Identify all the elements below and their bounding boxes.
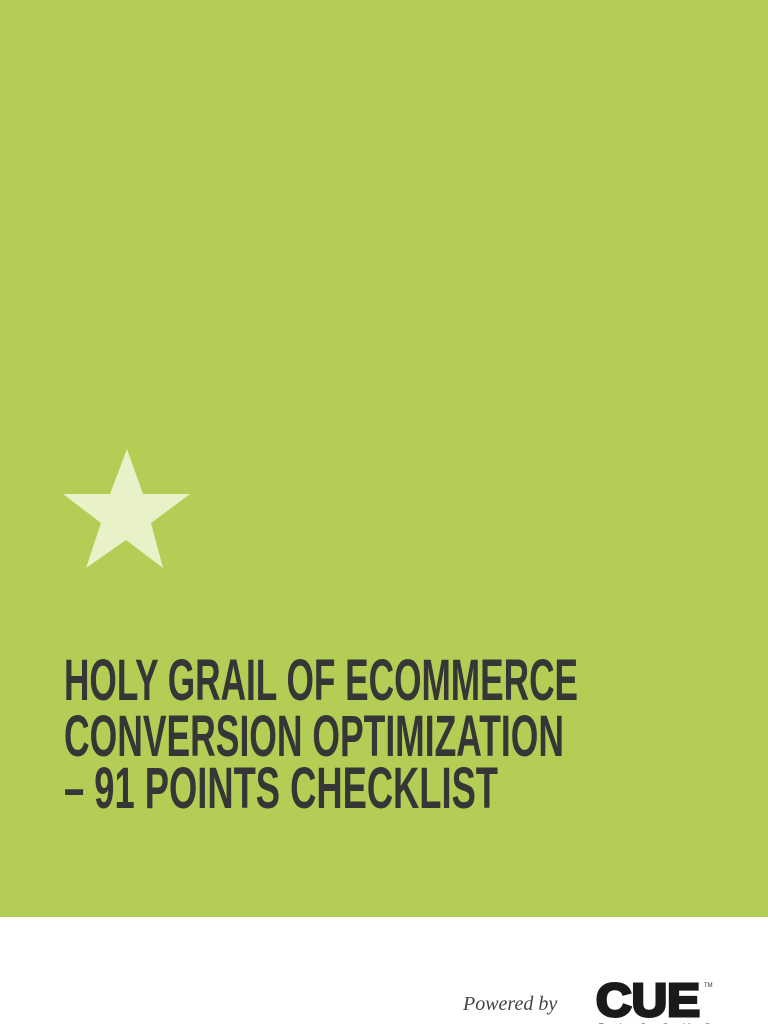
powered by text: Powered by (462, 993, 557, 1015)
title (64, 648, 578, 821)
logo: CUE BLOCKS: TM (704, 983, 713, 989)
title: – 91 POINTS CHECKLIST (64, 756, 498, 821)
icon: star (63, 449, 190, 568)
